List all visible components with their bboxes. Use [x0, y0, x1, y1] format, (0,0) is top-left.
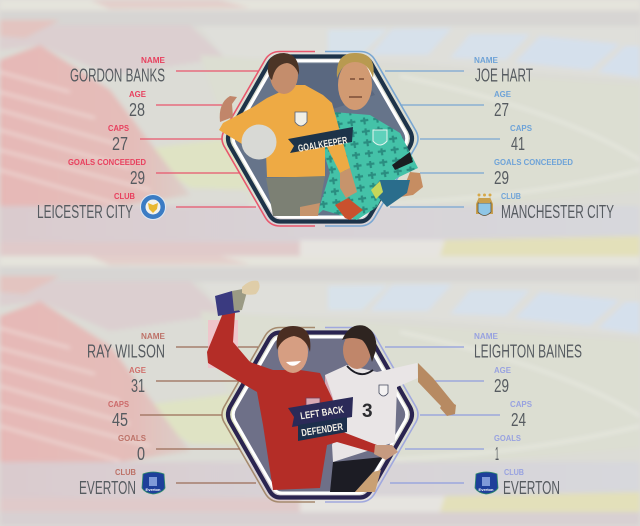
stats: Gordon Banks: 27 [112, 134, 128, 154]
stats: Ray Wilson: CLUB [115, 468, 136, 477]
icon: Manchester City badge [476, 194, 493, 216]
decorative cut-out artefacts [208, 320, 335, 415]
player: Gordon Banks [219, 53, 357, 216]
stats: Leighton Baines: 24 [511, 410, 526, 430]
stats: Ray Wilson: RAY WILSON [87, 342, 165, 362]
stats: Leighton Baines: 29 [494, 376, 509, 396]
stats: Joe Hart: GOALS CONCEEDED [494, 158, 573, 167]
stats: Gordon Banks [37, 56, 166, 222]
stats: Joe Hart: AGE [494, 90, 512, 99]
stats: Gordon Banks: GOALS CONCEEDED [68, 158, 146, 167]
stats: Ray Wilson: 0 [137, 444, 145, 464]
crest: three lions [295, 112, 307, 126]
stats: Ray Wilson: 31 [131, 376, 145, 396]
position ribbon: goalkeeper [288, 127, 353, 155]
crest: Hart shirt [373, 130, 387, 145]
player: Leighton Baines [325, 325, 456, 492]
stats: Ray Wilson: 45 [112, 410, 128, 430]
stats: Ray Wilson: GOALS [118, 434, 147, 443]
stats: Joe Hart [474, 56, 614, 222]
stats: Leighton Baines: CLUB [504, 468, 524, 477]
position ribbon: left back [288, 397, 353, 427]
stats: Joe Hart: 27 [494, 100, 509, 120]
position ribbon: defender: DEFENDER [301, 422, 344, 439]
stats: Leighton Baines: GOALS [494, 434, 522, 443]
stats: Joe Hart: 29 [494, 168, 509, 188]
icon: Everton badge right [475, 472, 498, 494]
icon: Everton badge right: Everton [479, 487, 494, 492]
connector lines: Leighton Baines [385, 347, 500, 483]
connector lines: Joe Hart [385, 71, 500, 207]
connector lines: Ray Wilson [140, 347, 258, 483]
stats: Gordon Banks: CAPS [108, 124, 130, 133]
stats: Joe Hart: CAPS [510, 124, 533, 133]
stats: Ray Wilson: AGE [129, 366, 147, 375]
stats: Leighton Baines: 1 [495, 444, 499, 464]
player: Ray Wilson [207, 281, 398, 490]
stats: Ray Wilson: NAME [141, 332, 166, 341]
icon: Leicester City badge [140, 194, 166, 220]
stats: Ray Wilson [79, 332, 166, 498]
stats: Leighton Baines: AGE [494, 366, 512, 375]
hexagon frame: left back [222, 328, 418, 502]
stats: Gordon Banks: GORDON BANKS [70, 66, 165, 86]
stats: Leighton Baines: CAPS [510, 400, 533, 409]
icon: World Cup trophy [215, 281, 260, 316]
stats: Joe Hart: JOE HART [475, 66, 533, 86]
stats: Joe Hart: CLUB [501, 192, 521, 201]
stats: Joe Hart: 41 [511, 134, 525, 154]
connector lines: Gordon Banks [140, 71, 258, 207]
stats: Ray Wilson: EVERTON [79, 478, 136, 498]
panel: left back comparison [79, 281, 582, 502]
stats: Joe Hart: NAME [474, 56, 499, 65]
position ribbon: defender [298, 417, 347, 441]
stats: Gordon Banks: LEICESTER CITY [37, 202, 133, 222]
stats: Ray Wilson: CAPS [108, 400, 130, 409]
stats: Gordon Banks: 28 [129, 100, 145, 120]
player: Leighton Baines: 3 [362, 401, 373, 422]
stats: Gordon Banks: 29 [130, 168, 145, 188]
stats: Gordon Banks: CLUB [114, 192, 135, 201]
stats: Leighton Baines: NAME [474, 332, 499, 341]
stats: Leighton Baines: LEIGHTON BAINES [474, 342, 582, 362]
stats: Gordon Banks: AGE [129, 90, 147, 99]
hexagon frame: goalkeeper [222, 52, 418, 226]
stats: Gordon Banks: NAME [141, 56, 166, 65]
panel: goalkeeper comparison [37, 52, 614, 226]
crest: Wilson shirt [306, 398, 320, 411]
icon: Everton badge left: Everton [146, 487, 161, 492]
stats: Leighton Baines: EVERTON [503, 478, 560, 498]
position ribbon: goalkeeper: GOALKEEPER [297, 135, 349, 155]
player: Joe Hart [317, 53, 423, 220]
position ribbon: left back: LEFT BACK [300, 405, 345, 422]
icon: Everton badge left [142, 472, 165, 494]
stats: Leighton Baines [474, 332, 582, 498]
